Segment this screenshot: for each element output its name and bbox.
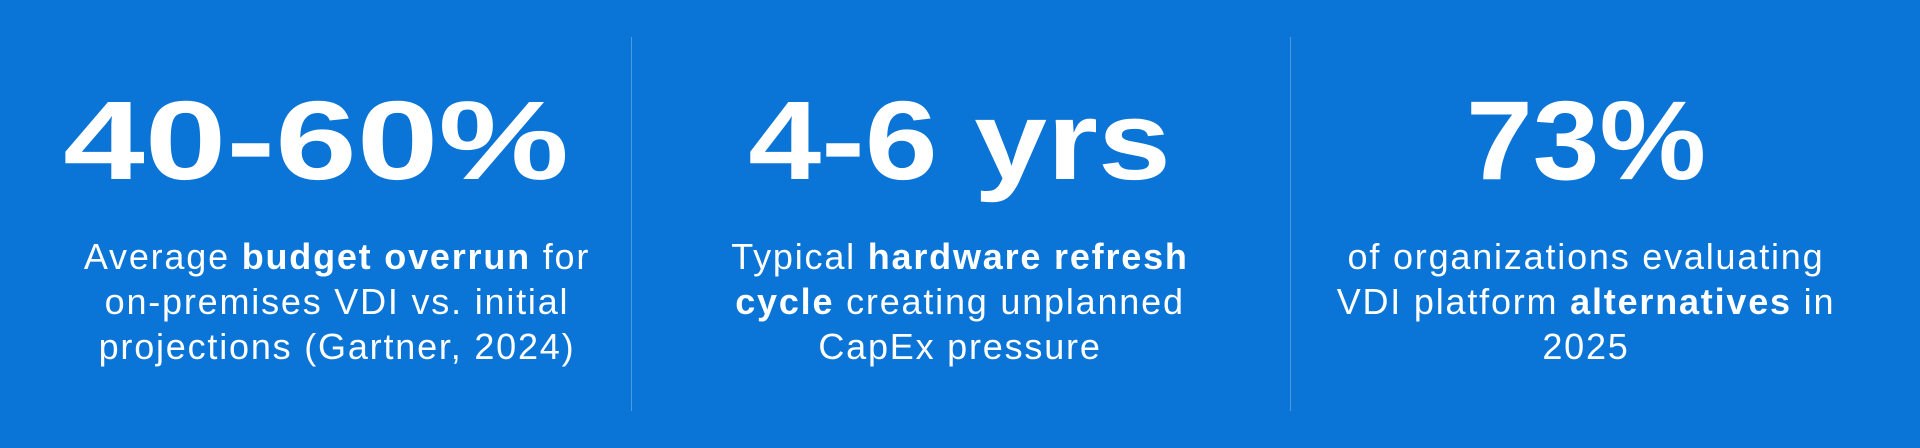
panel: budget overrun stat: [63, 78, 590, 367]
big number: 73%: 73%: [1466, 78, 1706, 203]
description: hardware refresh: [731, 236, 1189, 367]
description: alternatives: 2025: [1542, 326, 1630, 367]
description: alternatives: VDI platform alternatives in: [1337, 281, 1835, 322]
description: budget overrun: projections (Gartner, 2024): [99, 326, 575, 367]
description: budget overrun: on-premises VDI vs. initial: [105, 281, 569, 322]
big number: 4-6 yrs: 4-6 yrs: [749, 78, 1171, 203]
description: hardware refresh: CapEx pressure: [818, 326, 1102, 367]
description: hardware refresh: Typical hardware refresh: [731, 236, 1189, 277]
description: alternatives: [1336, 236, 1835, 367]
panel: alternatives stat: [1336, 78, 1835, 367]
description: budget overrun: [84, 236, 590, 367]
description: hardware refresh: cycle creating unplanned: [735, 281, 1185, 322]
big number: 40-60%: 40-60%: [63, 78, 569, 203]
description: alternatives: of organizations evaluating: [1348, 236, 1824, 277]
description: budget overrun: Average budget overrun for: [84, 236, 590, 277]
panel: hardware refresh stat: [731, 78, 1189, 367]
